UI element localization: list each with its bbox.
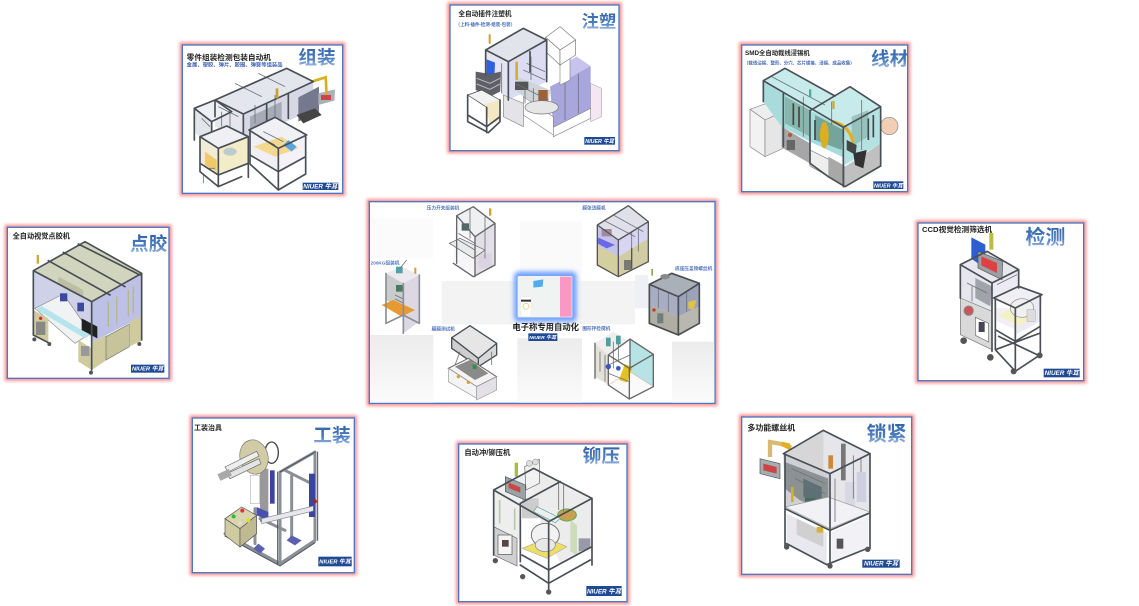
- machine title: 零件组装检测包装自动机: [187, 52, 271, 62]
- panel frame: [918, 223, 1084, 381]
- machine: bottom tester: [448, 326, 497, 400]
- panel: assembly: [182, 45, 343, 193]
- machine labels: 底座压盖锁螺丝机: [675, 265, 713, 272]
- panel frame: [7, 227, 169, 378]
- machine title: 自动冲/铆压机: [464, 448, 511, 457]
- logo: [873, 181, 904, 189]
- machine title: SMD全自动裁线浸锡机: [745, 48, 810, 57]
- logo: NIUER 牛耳: [132, 366, 165, 373]
- machine labels: [371, 204, 713, 333]
- category heading: 线材: [871, 48, 909, 69]
- panel frame: [742, 417, 912, 574]
- machine illustration: [194, 68, 335, 190]
- logo: [586, 586, 623, 596]
- logo: [318, 557, 352, 566]
- logo: NIUER 牛耳: [874, 182, 904, 189]
- machine illustration: [750, 68, 898, 187]
- machine subtitle: 金属、塑胶、弹片、胶圈、弹簧等组装品: [187, 61, 283, 69]
- panel: screw locking: [742, 417, 912, 574]
- logo: NIUER 牛耳: [529, 334, 557, 341]
- machine title: 多功能螺丝机: [747, 422, 795, 432]
- machine subtitle: （上料-插件-检测-组装-包装）: [456, 21, 515, 28]
- machine labels: 膜膜测试机: [432, 326, 455, 333]
- category heading: 检测: [1025, 225, 1065, 249]
- category heading: 组装: [298, 47, 336, 68]
- logo: [584, 137, 616, 145]
- machine: pressure switch assembler: [449, 207, 495, 277]
- machine labels: 膜张烫膜机: [582, 204, 606, 211]
- logo: NIUER 牛耳: [319, 559, 352, 566]
- background tiles: [370, 218, 714, 403]
- logo: NIUER 牛耳: [864, 560, 900, 568]
- panel frame: [450, 5, 619, 151]
- category heading: 注塑: [582, 11, 616, 31]
- machine: film ironing: [597, 206, 648, 277]
- machine title: CCD视觉检测筛选机: [922, 224, 993, 234]
- machine title: 全自动插件注塑机: [458, 9, 512, 18]
- logo: NIUER 牛耳: [303, 183, 339, 191]
- product image: scale: [514, 272, 577, 322]
- machine title: 全自动视觉点胶机: [13, 231, 71, 240]
- panel frame: [182, 45, 343, 193]
- panel: tooling: [192, 418, 354, 573]
- center heading: 电子称专用自动化: [512, 322, 580, 332]
- machine title: 工装治具: [194, 423, 222, 432]
- machine labels: 图形拌检搅机: [582, 325, 611, 332]
- category heading: 工装: [313, 425, 351, 446]
- machine: 200KG assembler: [382, 260, 419, 333]
- logo: NIUER 牛耳: [587, 587, 623, 595]
- panel: wire: [742, 45, 909, 192]
- machine labels: 200KG组装机: [371, 259, 400, 266]
- panel: riveting: [459, 444, 627, 602]
- panel frame: [192, 418, 354, 573]
- category heading: 点胶: [130, 234, 168, 255]
- panel frame: [459, 444, 627, 602]
- machine illustration: [32, 242, 142, 375]
- logo: NIUER 牛耳: [585, 138, 616, 145]
- machine labels: 压力开关组装机: [427, 204, 460, 211]
- category heading: 锁紧: [867, 422, 907, 445]
- panel: injection molding: [450, 5, 619, 151]
- panel: inspection: [918, 223, 1084, 381]
- panel: center electronic scale automation: [369, 202, 715, 403]
- machine: cover screw locker: [649, 269, 699, 335]
- machine illustration: [960, 233, 1043, 374]
- panel frame: [369, 202, 715, 403]
- category heading: 铆压: [583, 446, 620, 467]
- logo: NIUER 牛耳: [1045, 369, 1080, 377]
- machine subtitle: （裁线沾锡、整形、分穴、芯片锁接、浸锡、成品收集）: [744, 60, 855, 67]
- machine: robot inspection: [595, 332, 653, 399]
- machine illustration: [760, 430, 870, 569]
- machine illustration: [468, 27, 602, 137]
- machine illustration: [493, 459, 592, 595]
- panel: dispensing: [7, 227, 169, 378]
- machine illustration: [217, 437, 318, 566]
- panel frame: [742, 45, 908, 192]
